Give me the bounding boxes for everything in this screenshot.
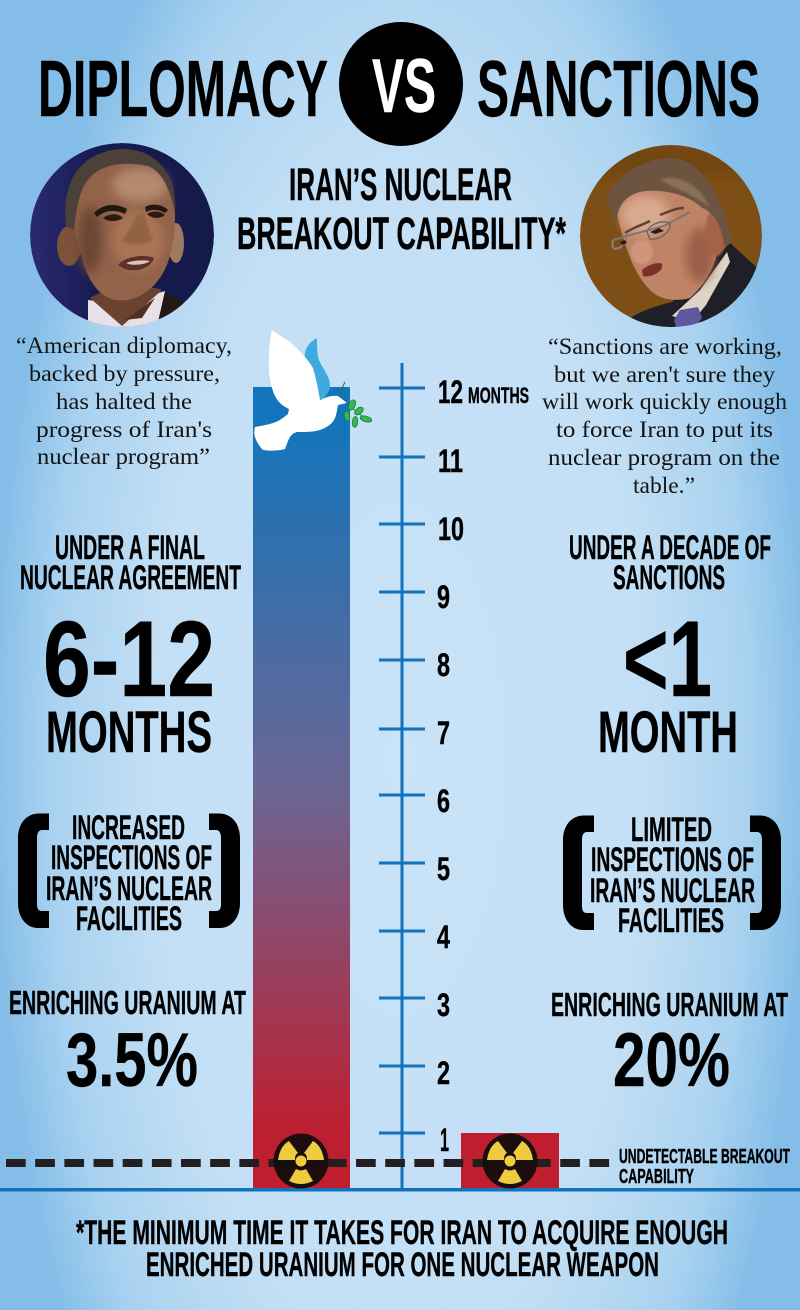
ground line [0,1188,800,1192]
quote: diplomacy: progress of Iran's [36,417,212,442]
vs badge [339,22,463,146]
olive branch [341,382,373,428]
label: undetectable breakout [619,1146,790,1188]
axis scale: 9 [437,579,450,615]
dashed line: undetectable threshold [6,1159,610,1167]
axis scale: 3 [437,987,450,1023]
title [38,22,760,146]
heading: decade of sanctions [569,529,771,597]
icon: dove with olive branch [254,330,373,451]
heading: final agreement: NUCLEAR AGREEMENT [20,559,241,597]
quote: sanctions: nuclear program on the [548,445,780,470]
bracket text: increased inspections: INSPECTIONS OF [51,839,212,877]
bar: sanctions [461,1133,559,1188]
quote: sanctions: to force Iran to put its [556,417,773,442]
stat: 6-12 months: 6-12 [43,598,215,719]
quote: sanctions [542,334,788,498]
bracket text: limited inspections: LIMITED [631,811,712,849]
quote: diplomacy [16,333,232,469]
icon: radiation right [482,1134,538,1188]
stat: 6-12 months [43,598,215,765]
quote: diplomacy: nuclear program” [37,444,210,469]
subtitle: IRAN’S NUCLEAR [289,159,512,210]
axis scale: 7 [437,715,450,751]
bar: diplomacy [253,387,350,1188]
bracket text: limited inspections: FACILITIES [618,902,724,940]
icon: radiation left [274,1134,328,1188]
stat: less than 1 month [598,598,738,765]
footnote [76,1214,728,1284]
quote: diplomacy: “American diplomacy, [16,333,232,358]
stat: enriching 20%: 20% [613,1018,730,1103]
title: DIPLOMACY [38,44,328,133]
quote: diplomacy: has halted the [56,389,192,414]
axis scale: 10 [438,511,464,547]
stat: 6-12 months: MONTHS [46,700,212,765]
axis scale: 12 [438,374,463,410]
quote: sanctions: “Sanctions are working, [548,334,782,359]
quote: sanctions: will work quickly enough [542,389,788,414]
axis scale: 8 [437,647,450,683]
portrait: Menendez [580,145,765,327]
bracket text: increased inspections [18,809,240,938]
vs badge: VS [372,44,436,129]
heading: final agreement: UNDER A FINAL [55,529,205,567]
subtitle: BREAKOUT CAPABILITY* [237,208,566,259]
subtitle [237,159,566,259]
axis scale: 2 [437,1055,450,1091]
label: undetectable breakout: CAPABILITY [619,1166,694,1188]
stat: enriching 3.5%: ENRICHING URANIUM AT [9,984,246,1021]
heading: final agreement [20,529,241,597]
bracket text: increased inspections: IRAN’S NUCLEAR [46,870,212,908]
axis scale [379,363,529,1188]
stat: less than 1 month: <1 [623,598,712,719]
axis scale: 11 [438,443,463,479]
stat: enriching 3.5%: 3.5% [66,1018,198,1103]
quote: sanctions: table.” [633,473,695,498]
quote: sanctions: but we aren't sure they [554,362,776,387]
axis scale: MONTHS [468,383,529,408]
stat: enriching 3.5% [9,984,246,1103]
bracket text: increased inspections: INCREASED [72,809,185,847]
portrait: Obama [30,143,214,330]
stat: enriching 20% [551,986,788,1103]
axis scale: 5 [437,851,450,887]
axis scale: 6 [437,783,450,819]
quote: diplomacy: backed by pressure, [29,361,220,386]
bracket text: limited inspections [563,811,781,940]
bracket text: increased inspections: FACILITIES [76,900,182,938]
axis scale: 1 [440,1122,449,1158]
axis scale: 4 [437,919,450,955]
